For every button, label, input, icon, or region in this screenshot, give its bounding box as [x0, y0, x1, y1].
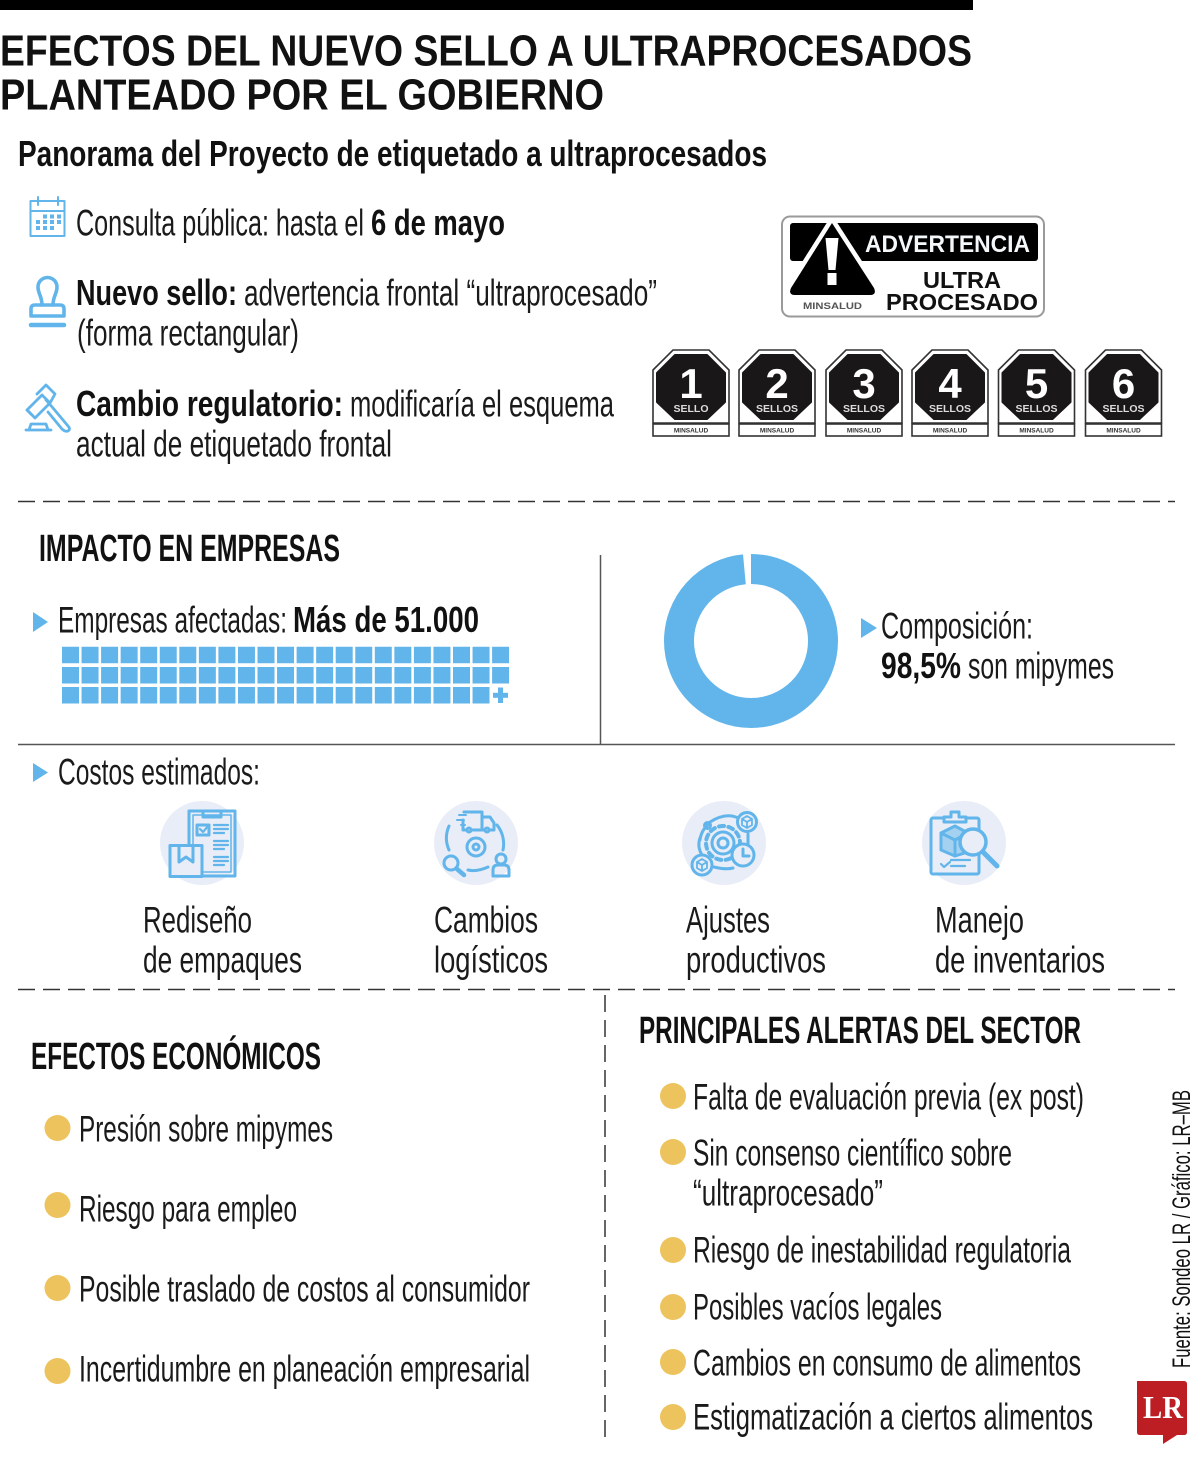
seal 2: 2 — [765, 360, 789, 407]
seal 4: 4 — [938, 360, 962, 407]
donut chart — [679, 569, 823, 713]
text: empresas afectadas: Empresas afectadas: — [58, 600, 287, 641]
seal 6: MINSALUD — [1106, 428, 1141, 434]
label: manejo de inventarios: de inventarios — [935, 940, 1105, 981]
text: consulta: 6 de mayo — [371, 202, 505, 243]
seal 6: SELLOS — [1102, 403, 1145, 415]
logo: LR: LR — [1143, 1389, 1184, 1425]
title: EFECTOS DEL NUEVO SELLO A ULTRAPROCESADOS — [0, 26, 972, 76]
text: empresas afectadas: Más de 51.000 — [293, 599, 479, 640]
seal 3 — [826, 350, 902, 436]
list item: costos: Posible traslado de costos al consumidor — [79, 1269, 530, 1310]
list item: consenso — [660, 1133, 1012, 1214]
label: cambios logisticos — [434, 900, 548, 981]
list item: presion: Presión sobre mipymes — [79, 1109, 333, 1150]
warning seal: advertencia ultraprocesado — [782, 216, 1044, 316]
list item: incertidumbre — [44, 1349, 530, 1390]
text: nuevo sello: (forma rectangular) — [77, 313, 299, 354]
text: cambio regulatorio — [76, 383, 614, 465]
icon: calendar — [30, 197, 64, 236]
title: PLANTEADO POR EL GOBIERNO — [0, 70, 604, 120]
seal 4 — [912, 350, 988, 436]
seal 5 — [998, 350, 1074, 436]
text: costos estimados: Costos estimados: — [58, 752, 260, 793]
label: ajustes productivos: productivos — [686, 940, 826, 981]
unit grid — [62, 655, 509, 703]
panel: impacto en empresas — [33, 528, 1114, 713]
text: cambio regulatorio: Cambio regulatorio: — [76, 383, 343, 424]
text: composicion: Composición: — [881, 606, 1033, 647]
panel: costos estimados — [33, 752, 1105, 981]
list item: consenso: Sin consenso científico sobre — [693, 1133, 1012, 1174]
text: nuevo sello — [76, 272, 657, 354]
text: composicion: 98,5% — [881, 645, 961, 686]
list item: empleo: Riesgo para empleo — [79, 1189, 297, 1230]
arrow — [861, 618, 877, 638]
label: manejo de inventarios: Manejo — [935, 900, 1024, 941]
seal 2: SELLOS — [756, 403, 798, 415]
seal 5: SELLOS — [1015, 403, 1058, 415]
label: rediseno: de empaques — [143, 940, 302, 981]
source credit: Fuente: Sondeo LR / Gráfico: LR–MB — [1168, 1090, 1196, 1368]
list item: consenso: “ultraprocesado” — [693, 1173, 883, 1214]
text: cambio regulatorio: actual de etiquetado frontal — [76, 424, 392, 465]
seal 1 — [653, 350, 729, 436]
warning seal: advertencia ultraprocesado: ULTRA — [923, 267, 1001, 293]
warning seal: advertencia ultraprocesado: MINSALUD — [803, 301, 862, 312]
icon: production — [682, 801, 766, 885]
panel: efectos economicos — [31, 1034, 530, 1390]
icon: gavel — [26, 385, 70, 431]
subtitle: Panorama del Proyecto de etiquetado a ultraprocesados — [18, 133, 767, 174]
panel: panorama — [26, 197, 657, 465]
seal 4: MINSALUD — [933, 428, 967, 434]
icon: logistics — [434, 801, 518, 885]
list item: empleo — [44, 1189, 297, 1230]
icon: inventory — [922, 801, 1006, 885]
seal 1: SELLO — [673, 403, 709, 415]
seal 6 — [1086, 350, 1162, 436]
label: manejo de inventarios — [935, 900, 1105, 981]
seal 1: MINSALUD — [674, 428, 708, 434]
label: rediseno — [143, 900, 302, 981]
text: composicion: son mipymes — [968, 646, 1114, 687]
title — [0, 26, 972, 120]
seal 3: SELLOS — [843, 403, 885, 415]
panel: principales alertas — [639, 1010, 1093, 1438]
list item: presion — [44, 1109, 333, 1150]
seal 2 — [739, 350, 815, 436]
seal 2: MINSALUD — [760, 428, 794, 434]
text: composicion — [881, 606, 1114, 687]
seal 4: SELLOS — [929, 403, 971, 415]
logo: LR — [1137, 1381, 1187, 1444]
heading: efectos economicos: EFECTOS ECONÓMICOS — [31, 1034, 321, 1078]
seal 5: 5 — [1025, 360, 1048, 407]
top bar — [0, 0, 973, 10]
seal 3: 3 — [852, 360, 876, 407]
seal 3: MINSALUD — [847, 428, 881, 434]
text: nuevo sello: Nuevo sello: — [76, 272, 237, 313]
list item: vacios — [660, 1287, 942, 1328]
warning seal: advertencia ultraprocesado: ADVERTENCIA — [865, 231, 1030, 258]
seal 6: 6 — [1112, 360, 1135, 407]
list item: costos — [44, 1269, 530, 1310]
text: consulta: Consulta pública: hasta el — [76, 203, 364, 244]
warning seal: advertencia ultraprocesado: PROCESADO — [886, 289, 1038, 315]
arrow — [33, 763, 48, 782]
text: nuevo sello: advertencia frontal “ultraprocesado” — [244, 273, 657, 314]
text: cambio regulatorio: modificaría el esquema — [350, 384, 614, 425]
list item: incertidumbre: Incertidumbre en planeación empresarial — [79, 1349, 530, 1390]
icon: stamp — [31, 278, 64, 325]
list item: vacios: Posibles vacíos legales — [693, 1287, 942, 1328]
label: cambios logisticos: logísticos — [434, 940, 548, 981]
label: ajustes productivos: Ajustes — [686, 900, 770, 941]
arrow — [33, 612, 48, 632]
seal 1: 1 — [679, 360, 703, 407]
seal 5: MINSALUD — [1019, 428, 1054, 434]
icon: packaging redesign — [160, 801, 244, 885]
label: ajustes productivos — [686, 900, 826, 981]
label: cambios logisticos: Cambios — [434, 900, 538, 941]
label: rediseno: Rediseño — [143, 900, 252, 941]
heading: impacto: IMPACTO EN EMPRESAS — [39, 528, 340, 570]
seals 1 to 6 — [653, 350, 1162, 436]
